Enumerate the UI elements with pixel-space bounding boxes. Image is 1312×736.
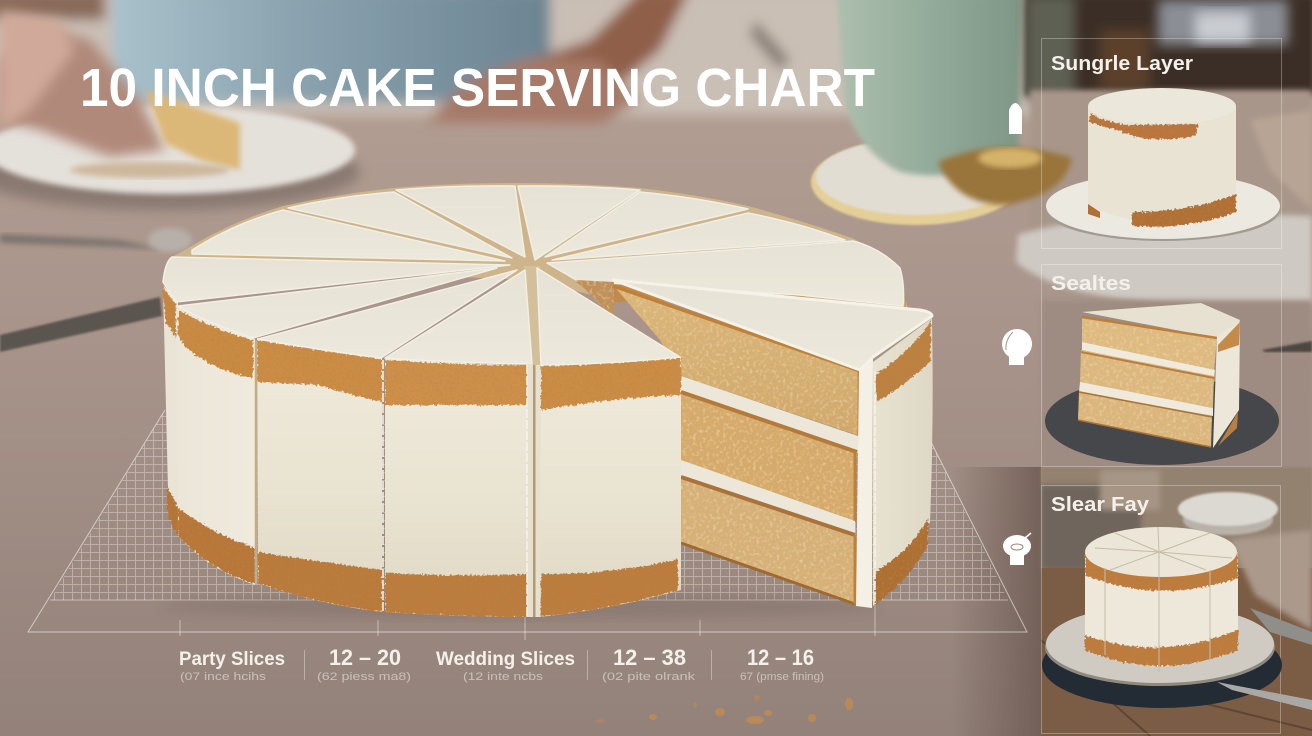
fork and knife on table <box>0 228 192 352</box>
panel heading: Slear Fay <box>1051 494 1150 516</box>
stat: 12-20 <box>317 645 411 683</box>
cake crumbs <box>595 695 853 724</box>
stat: 12-16: 12 – 16 <box>747 645 814 670</box>
stat: 12-16 <box>740 645 824 683</box>
panel heading: Sealtes <box>1051 273 1131 295</box>
side section 1 <box>177 305 255 585</box>
side section 3 <box>385 358 527 617</box>
stat: wedding slices: Wedding Slices <box>436 649 575 670</box>
cake body left edge <box>162 285 178 535</box>
cake slice <box>1078 303 1240 448</box>
icon: chef figure <box>1003 533 1031 565</box>
stat: 12-38: (02 pite olrank <box>602 671 696 683</box>
crust under back right slice <box>576 282 907 312</box>
slice seams <box>255 340 257 585</box>
stat: party slices: (07 ince hcihs <box>180 671 267 683</box>
outer right side of wedge <box>873 318 933 606</box>
back slices <box>192 186 904 306</box>
removed slice cut face <box>613 285 873 608</box>
sliced cake <box>1085 527 1238 672</box>
serving stats row <box>179 645 824 683</box>
dark plate <box>1045 377 1279 465</box>
stat: 12-38 <box>602 645 696 683</box>
knife <box>1217 608 1312 710</box>
dark plate <box>1042 622 1282 708</box>
stat: 12-20: 12 – 20 <box>329 645 401 670</box>
panel: single layer cake <box>1042 38 1282 248</box>
light plate <box>1045 605 1275 686</box>
stat: 12-16: 67 (pmse fining) <box>740 671 824 683</box>
main cake with slices <box>160 183 933 618</box>
green vase and stand <box>811 0 1022 225</box>
left plate <box>0 10 360 210</box>
gold bowl <box>938 147 1072 205</box>
measuring grid mat <box>28 400 1027 640</box>
side section 2 <box>257 338 382 612</box>
removed slice top frosting <box>613 280 932 370</box>
single layer cake <box>1088 88 1236 227</box>
white plate <box>1046 173 1280 241</box>
front slices <box>163 257 680 365</box>
panel heading: Sungrle Layer <box>1051 53 1193 75</box>
title: 10 INCH CAKE SERVING CHART <box>80 58 875 118</box>
side section 4 <box>540 357 681 617</box>
cake shadow <box>160 594 880 618</box>
icon: cake slice on dome <box>1002 329 1032 365</box>
panel: sliced whole cake <box>1042 486 1312 734</box>
stacked plates <box>1178 492 1278 535</box>
stat: party slices: Party Slices <box>179 649 285 670</box>
top base under slices <box>170 183 908 308</box>
stat: wedding slices <box>436 649 575 683</box>
stat: party slices <box>179 649 285 683</box>
panel: sliced piece <box>1042 264 1282 466</box>
seam between front slices <box>524 266 541 617</box>
stat: 12-20: (62 piess ma8) <box>317 671 411 683</box>
icon: single layer <box>1009 103 1022 134</box>
stat: wedding slices: (12 inte ncbs <box>463 671 544 683</box>
right column backdrop <box>950 0 1312 736</box>
stat: 12-38: 12 – 38 <box>613 645 686 670</box>
